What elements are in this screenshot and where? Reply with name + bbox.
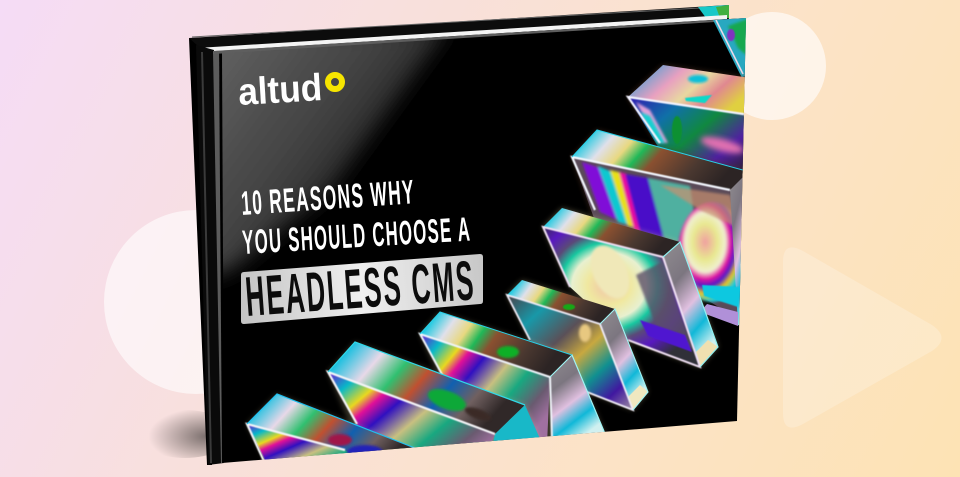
prism: centre small <box>507 280 648 410</box>
page block white edge <box>197 15 727 52</box>
heading line 1: 10 REASONS WHY <box>240 173 416 223</box>
prism: top right corner <box>713 18 746 77</box>
book <box>189 5 746 465</box>
back cover top edge <box>189 5 729 52</box>
prism: upper large <box>628 65 750 180</box>
prism: lower third <box>420 312 606 445</box>
highlighted label: Headless CMS <box>241 248 483 328</box>
prism: middle large <box>543 208 718 367</box>
halo <box>572 130 750 320</box>
halo <box>246 392 418 460</box>
cover gloss <box>222 39 447 283</box>
book drop shadow <box>137 410 233 458</box>
text: HEADLESS CMS <box>243 248 477 328</box>
logo ring <box>328 75 342 89</box>
background circle: left <box>104 210 288 394</box>
cover <box>219 18 746 463</box>
prism: lower second <box>325 340 540 452</box>
cover top bevel line <box>213 18 746 54</box>
background rounded play triangle <box>783 247 942 428</box>
halo <box>326 340 540 443</box>
halo <box>420 312 606 445</box>
rainbow stripes in pane <box>581 161 695 242</box>
spine <box>189 38 224 465</box>
logo: altud: altud <box>237 67 323 114</box>
text: YOU SHOULD CHOOSE A <box>241 210 472 262</box>
halo <box>507 280 648 410</box>
background circle: top right <box>718 12 826 120</box>
halo <box>543 208 718 367</box>
prism: bottom left <box>244 392 418 460</box>
prism: second large <box>572 130 750 330</box>
prism artwork <box>247 16 750 470</box>
halo <box>628 65 750 180</box>
